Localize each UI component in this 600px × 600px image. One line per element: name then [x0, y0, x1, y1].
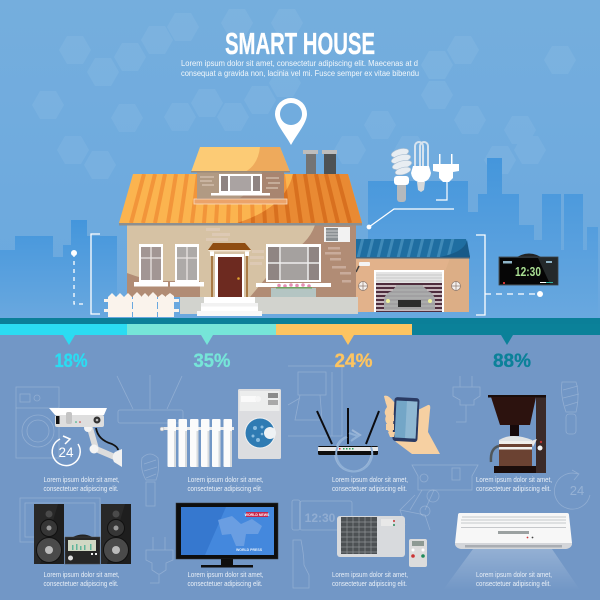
icon: AC remote [409, 539, 427, 567]
icon: spiral bulb [390, 147, 413, 202]
outline: spiral bulb 2 [562, 382, 579, 434]
outline 24 label: 24 [570, 483, 584, 498]
caption 5: consectetuer adipiscing elit. [44, 579, 118, 588]
percent 18: 18% [54, 350, 88, 372]
caption 8: Lorem ipsum dolor sit amet, [476, 570, 552, 579]
icon: digital clock: 12:30 [515, 265, 541, 279]
icon: plug [433, 154, 459, 200]
wall [127, 225, 356, 297]
windows [134, 244, 331, 287]
icon: television: WORLD PRESS [236, 548, 263, 552]
garage [356, 238, 470, 312]
fence [104, 292, 179, 317]
hexagon pattern [32, 9, 576, 179]
caption 2: consectetuer adipiscing elit. [188, 484, 262, 493]
icon: wifi router [317, 408, 379, 471]
garage door [374, 270, 444, 312]
icon: tube bulb [411, 142, 431, 192]
caption 4 [476, 475, 552, 493]
caption 1 [44, 475, 120, 493]
percent 35: 35% [194, 350, 230, 372]
icon: television: WORLD NEWS [245, 513, 270, 517]
caption 3: consectetuer adipiscing elit. [332, 484, 407, 493]
caption 6 [188, 570, 264, 588]
outline: router [117, 375, 183, 423]
outline: refresh [335, 430, 371, 471]
icon: washing machine [238, 389, 281, 459]
icon: television [176, 503, 278, 568]
connector: right bracket and dashes [476, 235, 543, 315]
subtitle: Lorem ipsum dolor sit amet, consectetur adipiscing elit. Maecenas at d [181, 58, 418, 68]
ground strip [0, 318, 600, 324]
outline: robot arm [400, 495, 430, 530]
icon: outdoor AC unit [337, 516, 405, 557]
subtitle [181, 58, 419, 78]
caption 5 [44, 570, 120, 588]
garage wall [356, 258, 469, 312]
colour bar [0, 324, 600, 345]
outline clock time: 12:30 [305, 511, 336, 525]
city skyline right [368, 158, 598, 318]
outline: TV [20, 498, 100, 542]
caption 8: consectetuer adipiscing elit. [476, 579, 551, 588]
main roof [119, 174, 362, 226]
faint outline icons [16, 366, 590, 588]
captions [44, 475, 552, 588]
outline: washing machine [16, 387, 59, 458]
percent 88: 88% [493, 350, 531, 372]
small camera [356, 262, 370, 272]
caption 3 [332, 475, 408, 493]
icon: location pin [275, 98, 307, 145]
outline: phone [292, 500, 300, 530]
caption 7: Lorem ipsum dolor sit amet, [332, 570, 408, 579]
connector: left bracket [71, 234, 100, 314]
outline: coffee maker [288, 366, 342, 436]
caption 7 [332, 570, 408, 588]
garage vents [358, 282, 460, 290]
light cone from AC [443, 549, 580, 590]
stereo unit [65, 534, 100, 564]
wall air conditioner [324, 227, 350, 242]
caption 5: Lorem ipsum dolor sit amet, [44, 570, 120, 579]
caption 1: consectetuer adipiscing elit. [44, 484, 118, 493]
background sky [0, 0, 600, 318]
title: SMART HOUSE [225, 26, 375, 61]
brick details [206, 228, 351, 282]
chimneys [303, 150, 337, 174]
caption 4: consectetuer adipiscing elit. [476, 484, 551, 493]
caption 2: Lorem ipsum dolor sit amet, [188, 475, 264, 484]
caption 6: Lorem ipsum dolor sit amet, [188, 570, 264, 579]
caption 4: Lorem ipsum dolor sit amet, [476, 475, 552, 484]
dormer [194, 172, 287, 204]
house [104, 147, 370, 317]
icon: coffee maker [488, 395, 546, 473]
icon: digital clock [499, 254, 558, 285]
flower planter [271, 283, 316, 297]
icon: 24 hours [52, 436, 80, 466]
outline: plug 1 [146, 537, 173, 583]
left speaker [34, 504, 64, 564]
caption 6: consectetuer adipiscing elit. [188, 579, 262, 588]
outline: clock [300, 501, 352, 530]
subtitle: consequat a gravida non, lacinia vel mi. Fusce semper ex vitae bibendu [181, 68, 419, 78]
icon: speakers and stereo [34, 504, 131, 564]
outline: spiral bulb 1 [142, 454, 159, 506]
caption 7: consectetuer adipiscing elit. [332, 579, 407, 588]
connector: garage to bulbs [367, 209, 454, 229]
outline: 24 hours [554, 470, 590, 509]
caption 3: Lorem ipsum dolor sit amet, [332, 475, 408, 484]
icon: 24 hours: 24 [58, 445, 74, 460]
outline: plug 2 [453, 376, 480, 422]
caption 1: Lorem ipsum dolor sit amet, [44, 475, 120, 484]
caption 8 [476, 570, 552, 588]
dormer roof [191, 147, 290, 172]
garage roof [356, 238, 470, 258]
right speaker [101, 504, 131, 564]
outline: bulb 3 [293, 540, 309, 588]
icon: radiator [160, 419, 234, 467]
door and porch [208, 243, 251, 297]
icon: indoor AC [455, 513, 572, 549]
plinth and steps [180, 297, 358, 316]
caption 2 [188, 475, 264, 493]
city skyline left [0, 220, 117, 318]
outline: camera [410, 465, 478, 510]
icon: hand with phone [384, 396, 440, 454]
icon: security camera [49, 408, 122, 467]
percent 24: 24% [334, 350, 372, 372]
background lower panel [0, 324, 600, 600]
